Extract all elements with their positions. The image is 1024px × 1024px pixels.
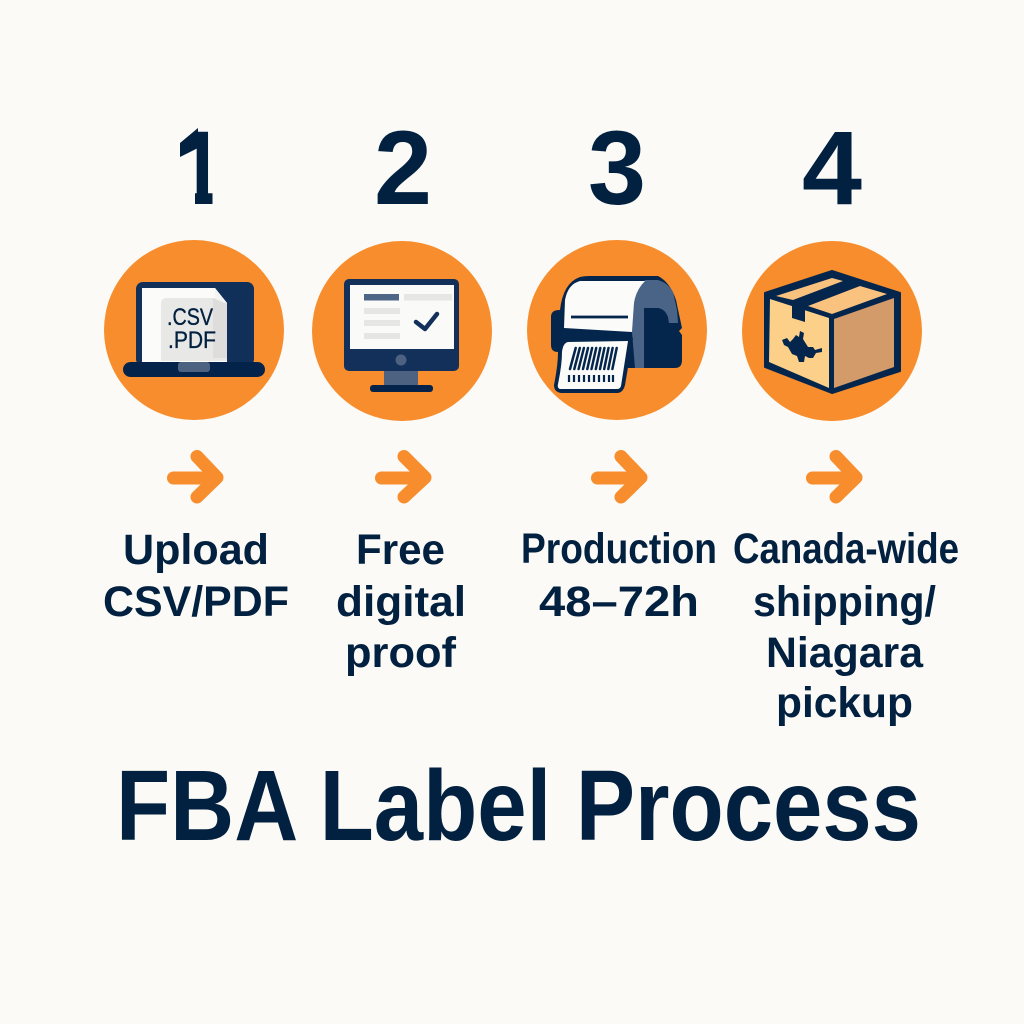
label: shipping and pickup: Canada-wide: [733, 525, 959, 573]
label: upload: Upload: [123, 526, 269, 574]
label: shipping and pickup: shipping/: [753, 578, 936, 626]
arrow: step 3 to 4: [598, 456, 641, 497]
label: shipping and pickup: Niagara: [766, 629, 924, 677]
step numbers: 4: [802, 110, 862, 227]
step numbers: 3: [588, 110, 646, 227]
icon: maple leaf mark: [782, 331, 822, 362]
label: upload: [103, 526, 289, 626]
title: FBA Label Process: [116, 750, 921, 862]
label: production time: Production: [521, 525, 717, 573]
arrow: step 1 to 2: [174, 456, 217, 497]
step numbers: 1: [177, 110, 223, 227]
icon: laptop with CSV and PDF document: .PDF: [168, 327, 216, 354]
label: free digital proof: proof: [345, 629, 457, 677]
icon: shipping box with maple leaf: [742, 241, 922, 421]
label: free digital proof: digital: [336, 578, 466, 626]
icon: laptop with CSV and PDF document: .CSV: [167, 304, 213, 331]
step numbers: [170, 110, 862, 227]
label: free digital proof: Free: [356, 526, 445, 574]
step numbers: 2: [374, 110, 432, 227]
arrow: step 2 to 3: [382, 456, 425, 497]
label: production time: 48–72h: [539, 578, 699, 626]
icon: label printer: [527, 240, 707, 420]
label: shipping and pickup: pickup: [776, 679, 913, 727]
label: production time: [521, 525, 717, 626]
label: free digital proof: [336, 526, 466, 677]
arrow: step 4: [812, 456, 856, 497]
icon: laptop with CSV and PDF document: [104, 240, 284, 420]
label: shipping and pickup: [733, 525, 959, 727]
icon: monitor with digital proof: [312, 241, 492, 421]
label: upload: CSV/PDF: [103, 578, 289, 626]
